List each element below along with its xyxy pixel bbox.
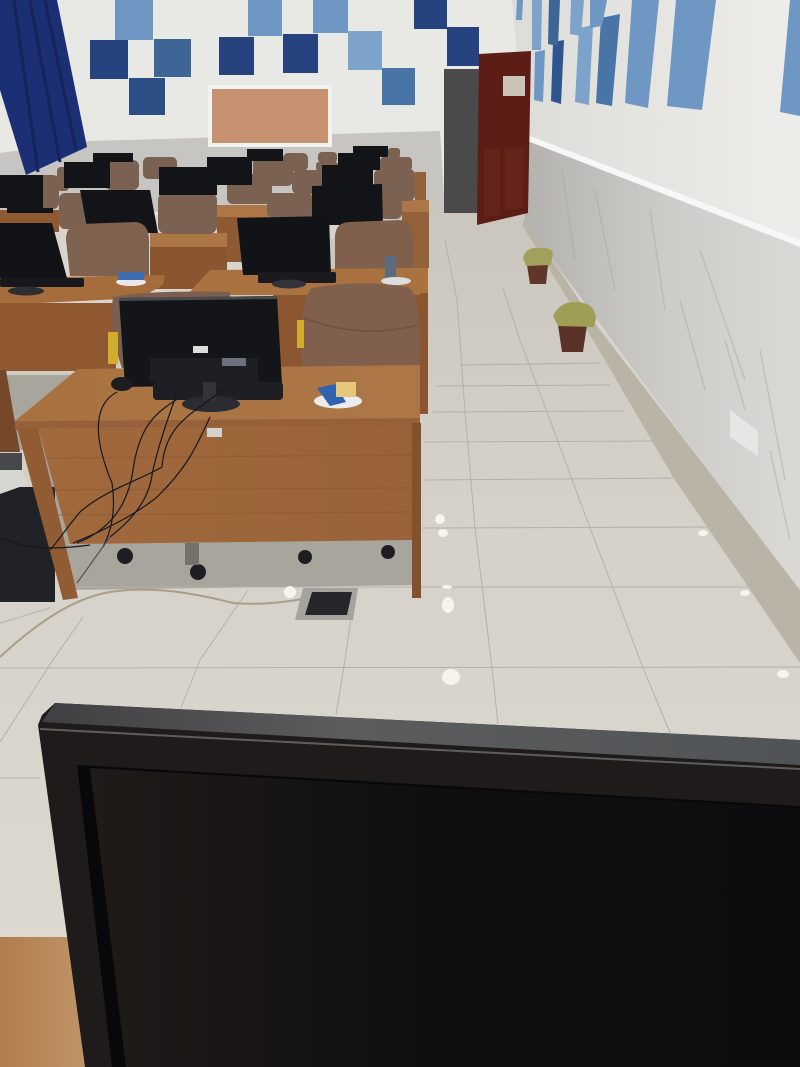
foreground desk	[0, 937, 86, 1067]
baseboard	[522, 218, 800, 663]
snack plate	[314, 382, 362, 408]
far left computer tower	[0, 370, 55, 602]
mouse	[111, 377, 133, 391]
front monitor	[119, 296, 283, 412]
far rows: chairs	[33, 148, 415, 234]
acoustic panels: side wall	[516, 0, 800, 116]
far rows: desks	[0, 172, 429, 289]
wooden door	[477, 51, 531, 225]
back wall marble wainscot	[0, 131, 445, 212]
notice board	[208, 85, 332, 147]
marble veins	[562, 170, 790, 540]
chair rail	[525, 134, 800, 247]
wall power socket	[730, 410, 758, 456]
chair bases	[117, 543, 395, 580]
far rows: monitors	[0, 146, 388, 233]
right wall marble	[525, 137, 800, 595]
shadow under desks	[0, 375, 420, 590]
middle row right desk	[187, 216, 428, 414]
back wall	[0, 0, 530, 215]
right wall upper	[512, 0, 800, 245]
front desk	[15, 365, 421, 600]
floor outlet box	[295, 588, 358, 620]
front desk chairs	[108, 283, 420, 368]
cables	[0, 387, 227, 583]
middle row left desk	[0, 222, 165, 371]
padded back door	[444, 69, 479, 213]
floor reflections	[284, 514, 789, 685]
curtain	[0, 0, 87, 175]
floor cable	[0, 590, 338, 657]
acoustic panels: back wall	[90, 0, 479, 115]
foreground monitor	[38, 703, 800, 1067]
wastebaskets	[523, 248, 596, 352]
floor tile lines	[0, 240, 800, 778]
